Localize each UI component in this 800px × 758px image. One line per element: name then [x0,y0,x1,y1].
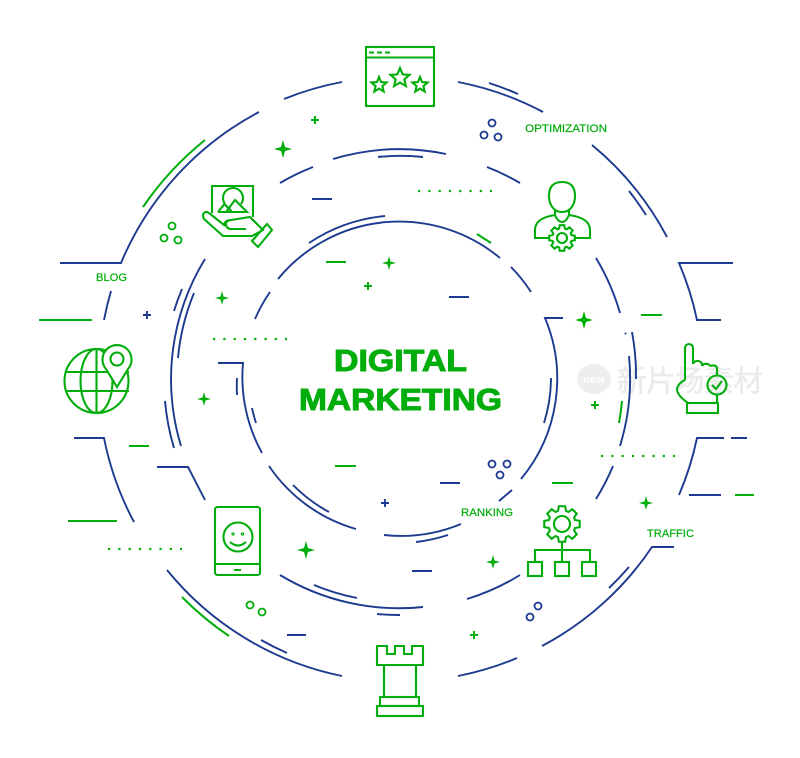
small circles: blue [480,120,542,620]
icon: pointing hand with check [677,344,726,413]
title [299,343,502,417]
watermark: 新片场素材 [617,365,763,398]
icon: gear with hierarchy [528,506,596,576]
label: optimization: OPTIMIZATION [525,123,607,135]
middle ring [157,149,636,615]
label: traffic: TRAFFIC [647,528,694,540]
outer ring [60,82,747,676]
title: MARKETING [299,382,502,417]
watermark: new [583,374,605,386]
icon: hand holding picture [203,186,272,247]
icon: browser with star rating [366,47,434,106]
green accent arcs [143,140,622,636]
blue plus marks [143,311,389,507]
dash marks: green [39,262,754,521]
icon: person with gear [535,182,590,251]
dotted lines [108,191,675,549]
icon: globe with location pin [64,345,132,413]
label: ranking: RANKING [461,507,513,519]
small circles: green [160,222,266,616]
stray dot [624,332,626,334]
dash marks: blue [287,199,469,635]
icon: rook chess piece [377,646,423,716]
label: blog: BLOG [96,272,127,284]
inner ring [218,216,563,542]
green plus marks [311,116,599,639]
icon: smartphone with smiley [215,507,260,575]
title: DIGITAL [334,343,467,378]
sparkles [197,140,653,569]
